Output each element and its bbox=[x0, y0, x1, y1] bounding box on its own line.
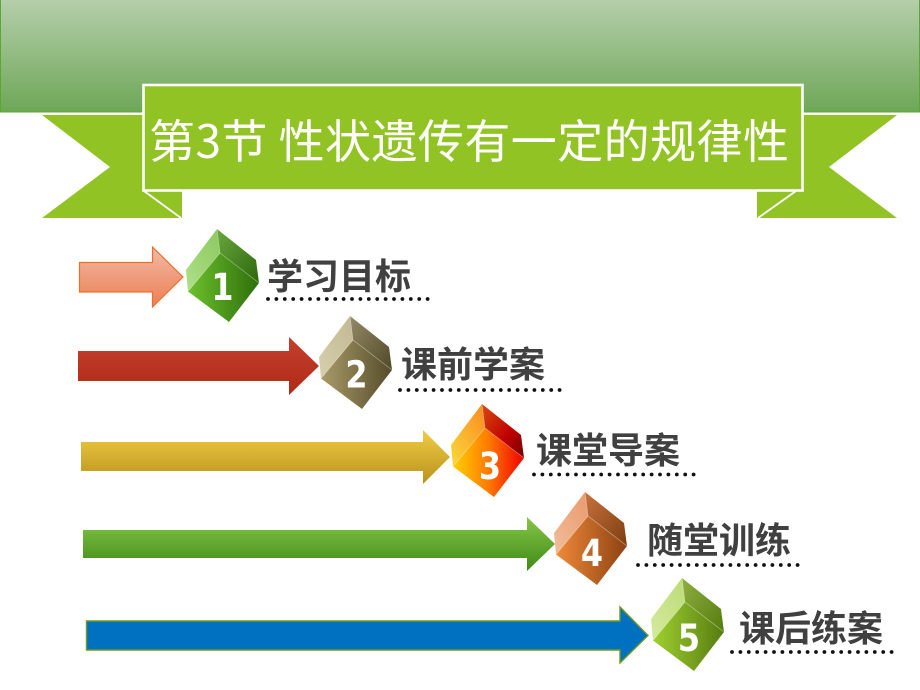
cube 5: 5 bbox=[678, 618, 700, 661]
right ribbon tail bbox=[757, 115, 897, 218]
label 1: 学习目标 bbox=[267, 256, 411, 297]
ribbon title banner bbox=[42, 85, 897, 218]
cube 4: 4 bbox=[581, 533, 603, 576]
arrow 3 bbox=[81, 430, 450, 484]
label 3: 课堂导案 bbox=[536, 430, 680, 471]
label 4: 随堂训练 bbox=[647, 520, 791, 561]
cube 5 bbox=[651, 578, 724, 671]
cube 3 bbox=[451, 404, 524, 497]
label 2: 课前学案 bbox=[401, 344, 545, 385]
cube 2 bbox=[319, 316, 392, 409]
title: 第3节 性状遗传有一定的规律性 bbox=[149, 106, 789, 172]
cube 2: 2 bbox=[345, 354, 368, 397]
arrow 5 bbox=[86, 607, 648, 663]
label 5: 课后练案 bbox=[739, 608, 883, 649]
cube 4 bbox=[554, 492, 627, 585]
arrow 4 bbox=[83, 517, 555, 571]
arrow 1 bbox=[80, 247, 183, 307]
cube 1: 1 bbox=[211, 267, 234, 310]
cube 1 bbox=[186, 229, 259, 322]
title box bbox=[144, 85, 802, 190]
arrow 2 bbox=[78, 337, 319, 395]
cube 3: 3 bbox=[479, 446, 501, 489]
header band bbox=[0, 0, 920, 112]
left ribbon tail bbox=[42, 115, 182, 218]
